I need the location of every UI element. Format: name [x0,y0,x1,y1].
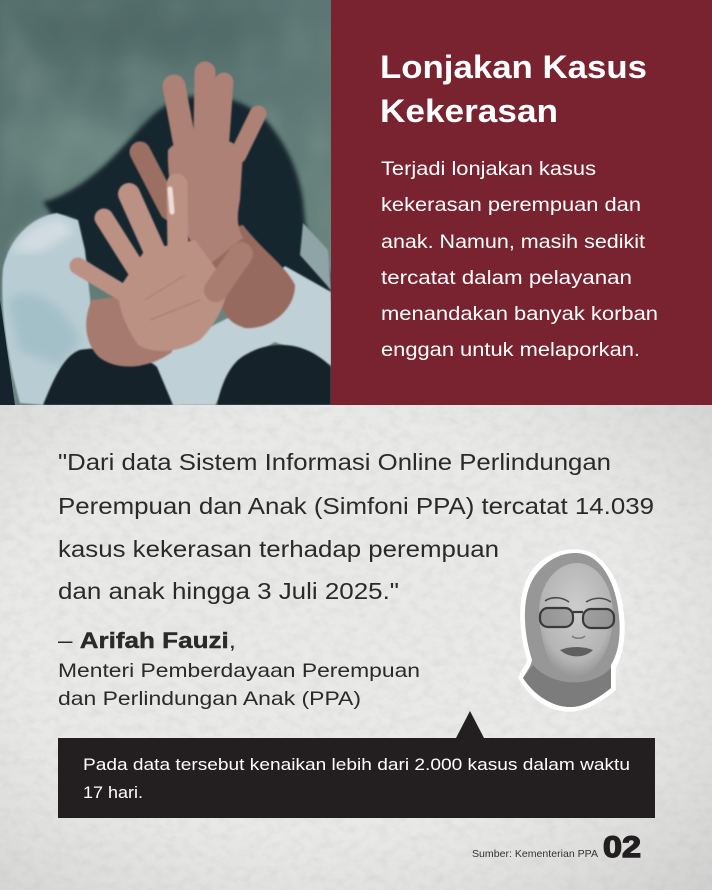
attribution: dan Perlindungan Anak (PPA) [58,688,361,710]
quote text block: Perempuan dan Anak (Simfoni PPA) tercatat 14.039 [58,493,654,519]
trousers [43,348,173,405]
intro text block: enggan untuk melaporkan. [381,339,640,361]
heading [380,49,647,129]
shirt [2,213,185,405]
headscarf [523,553,620,707]
back arm [211,224,296,329]
face [539,563,613,676]
quote text block: dan anak hingga 3 Juli 2025." [58,578,399,604]
intro text block: kekerasan perempuan dan [381,194,641,216]
front hand [78,184,241,351]
hair [43,96,331,300]
intro text block: tercatat dalam pelayanan [381,267,632,289]
panel: maroon title panel [331,0,712,405]
attribution [58,628,420,710]
glasses [540,608,614,628]
attribution: Menteri Pemberdayaan Perempuan [58,660,420,682]
quote text block [58,449,654,604]
portrait: Arifah Fauzi [519,550,624,711]
source note: Sumber: Kementerian PPA [472,848,598,860]
back hand [140,72,258,268]
callout: data box with pointer [58,711,655,818]
intro text block: menandakan banyak korban [381,303,658,325]
callout: data box with pointer: Pada data tersebut kenaikan lebih dari 2.000 kasus dalam waktu [83,756,630,774]
sticker outline [519,550,624,711]
photo: woman raising both hands [0,0,331,405]
eyebrows [545,598,611,602]
heading: Kekerasan [380,93,558,129]
mouth [560,647,593,656]
callout: data box with pointer: 17 hari. [83,784,143,802]
paper background [0,405,712,890]
intro text block [381,158,658,361]
page number: 02 [603,831,641,864]
nose [572,636,585,638]
attribution: – Arifah Fauzi , [58,628,236,653]
front forearm [86,290,172,367]
intro text block: anak. Namun, masih sedikit [381,231,646,253]
intro text block: Terjadi lonjakan kasus [381,158,596,180]
quote text block: kasus kekerasan terhadap perempuan [58,536,499,562]
quote text block: "Dari data Sistem Informasi Online Perlindungan [58,449,611,475]
heading: Lonjakan Kasus [380,49,647,85]
